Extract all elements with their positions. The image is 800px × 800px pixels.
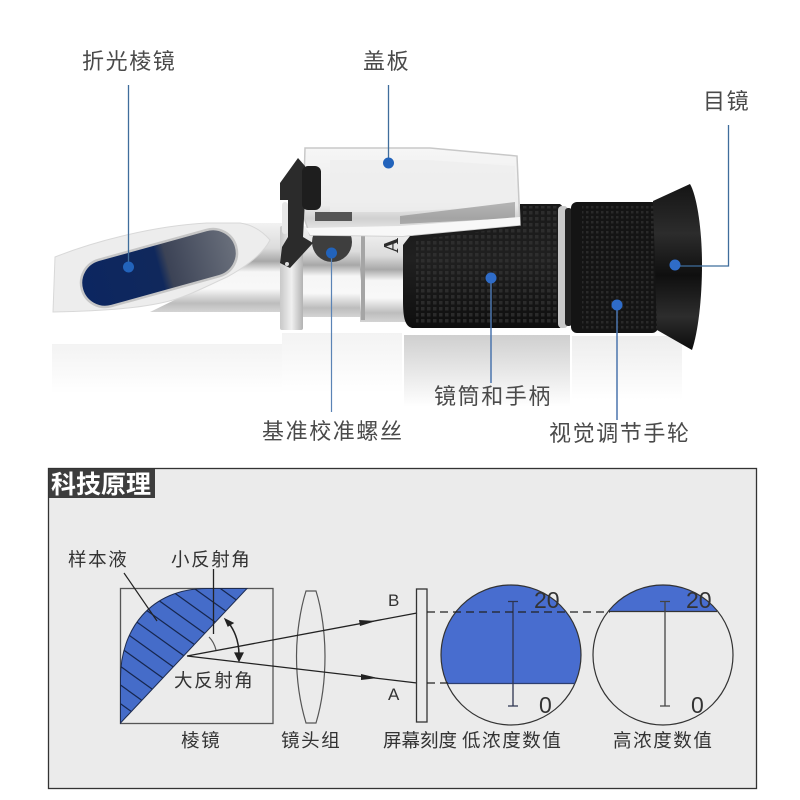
label: vision adjustment wheel: 视觉调节手轮 xyxy=(549,421,691,446)
engraved letter on tube: A xyxy=(379,237,403,253)
label: eyepiece: 目镜 xyxy=(703,89,750,114)
high concentration circle xyxy=(593,585,734,751)
product photo: refractometer xyxy=(52,148,702,407)
prism diagram xyxy=(68,550,274,748)
label: eyepiece xyxy=(670,89,750,270)
label: prism xyxy=(82,49,176,272)
screen scale: 屏幕刻度 xyxy=(383,730,457,751)
label: prism: 折光棱镜 xyxy=(82,49,176,74)
reflection under the instrument xyxy=(52,333,682,407)
low concentration circle: 20 xyxy=(534,587,560,613)
sample liquid label: 样本液 xyxy=(68,549,128,570)
label: cover plate: 盖板 xyxy=(363,49,410,74)
transparent cover plate xyxy=(303,148,520,236)
hinge clip xyxy=(280,158,321,268)
light rays xyxy=(187,613,417,683)
small reflection angle label xyxy=(171,549,251,634)
high concentration circle: 高浓度数值 xyxy=(613,730,714,751)
small reflection angle label: 小反射角 xyxy=(171,549,251,570)
prism label: 棱镜 xyxy=(181,730,221,751)
low concentration circle: 0 xyxy=(539,692,552,718)
label: barrel and handle: 镜筒和手柄 xyxy=(434,384,552,409)
calibration screw xyxy=(312,222,352,262)
large reflection angle label: 大反射角 xyxy=(174,670,254,691)
label: calibration screw xyxy=(262,248,404,444)
dashed guide lines xyxy=(427,612,610,683)
panel: technology principle xyxy=(11,468,756,788)
angle arcs xyxy=(209,619,243,661)
high concentration circle: 20 xyxy=(686,587,712,613)
high concentration circle: 0 xyxy=(691,692,704,718)
label: calibration screw: 基准校准螺丝 xyxy=(262,419,404,444)
rubber eyepiece xyxy=(653,184,702,350)
screen scale xyxy=(383,589,457,751)
lens group xyxy=(281,591,341,751)
label: cover plate xyxy=(363,49,410,168)
prism head with window xyxy=(53,223,270,313)
low concentration circle xyxy=(441,585,582,751)
panel heading: 科技原理 xyxy=(51,471,151,499)
label: vision adjustment wheel xyxy=(549,300,691,446)
black knurled barrel and handle xyxy=(403,204,572,328)
lens group: 镜头组 xyxy=(281,730,341,751)
vision adjustment wheel xyxy=(571,202,658,333)
low concentration circle: 低浓度数值 xyxy=(462,730,563,751)
metal tube xyxy=(150,223,410,330)
screen scale: B xyxy=(388,591,399,610)
label: barrel and handle xyxy=(434,272,552,409)
screen scale: A xyxy=(388,685,400,704)
sample liquid label xyxy=(68,549,157,621)
